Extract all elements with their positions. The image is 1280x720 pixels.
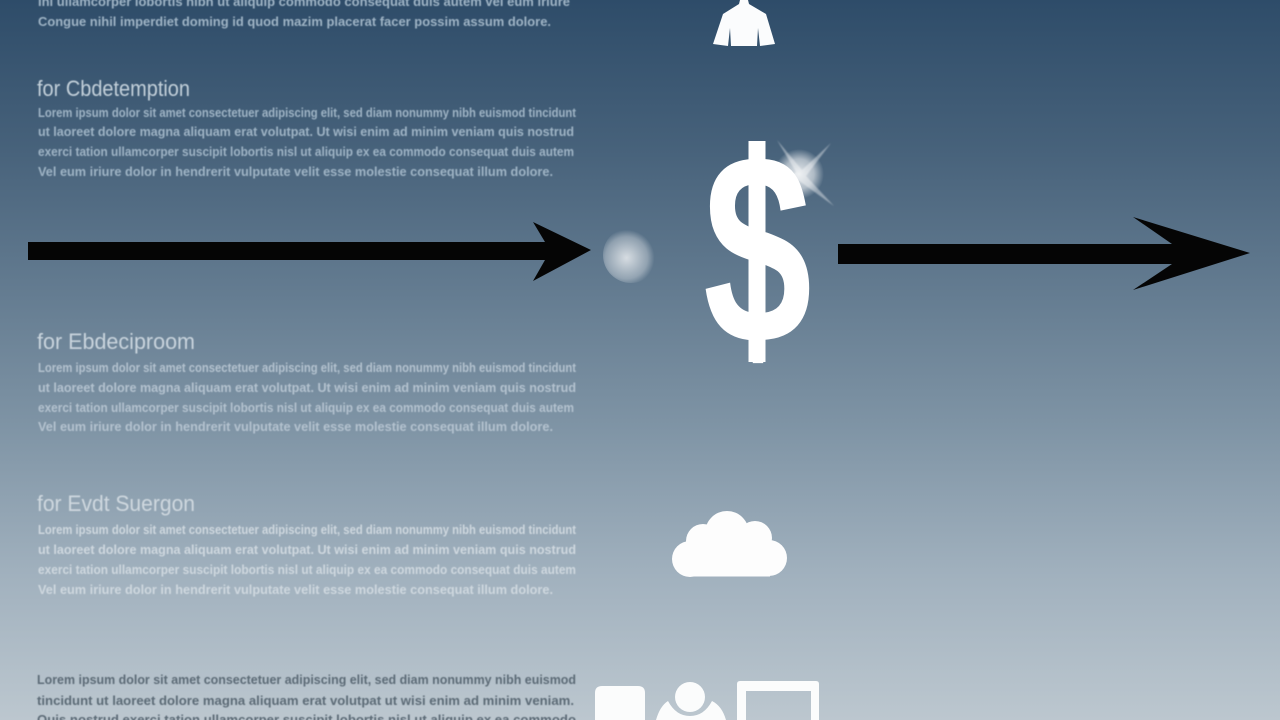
- arrow: left: [28, 222, 591, 281]
- text block: bottom paragraph: [37, 672, 576, 720]
- paragraph: section one: exerci tation ullamcorper suscipit lobortis nisl ut aliquip ex ea commodo consequat duis autem: [38, 144, 574, 159]
- text block: bottom paragraph: tincidunt ut laoreet dolore magna aliquam erat volutpat ut wisi enim ad minim veniam.: [37, 693, 574, 708]
- icon: cloud: [672, 511, 787, 577]
- paragraph: section three: exerci tation ullamcorper suscipit lobortis nisl ut aliquip ex ea commodo consequat duis autem: [38, 562, 576, 577]
- paragraph: section two: [38, 360, 577, 434]
- text block: section one: [37, 76, 577, 179]
- icon: monitor frame: [737, 681, 819, 720]
- paragraph: section one: Lorem ipsum dolor sit amet consectetuer adipiscing elit, sed diam nonummy nibh euismod tincidunt: [38, 105, 577, 120]
- paragraph: section three: Lorem ipsum dolor sit amet consectetuer adipiscing elit, sed diam nonummy nibh euismod tincidunt: [38, 522, 577, 537]
- text block: section three: [37, 491, 577, 597]
- heading: section two: for Ebdeciproom: [37, 329, 195, 354]
- heading: section one: for Cbdetemption: [37, 76, 190, 101]
- icon: person top: [713, 0, 775, 46]
- icon: dollar sign: $: [703, 97, 812, 402]
- text block: top cropped paragraph: Congue nihil imperdiet doming id quod mazim placerat facer possim assum dolore.: [38, 14, 551, 29]
- icon: document block: [595, 686, 645, 720]
- paragraph: section three: Vel eum iriure dolor in hendrerit vulputate velit esse molestie consequat illum dolore.: [38, 582, 553, 597]
- glow orb: [603, 227, 659, 283]
- paragraph: section three: [38, 522, 577, 597]
- sparkle on dollar sign: [774, 140, 834, 206]
- paragraph: section one: Vel eum iriure dolor in hendrerit vulputate velit esse molestie consequat illum dolore.: [38, 164, 553, 179]
- text block: bottom paragraph: Lorem ipsum dolor sit amet consectetuer adipiscing elit, sed diam nonummy nibh euismod: [37, 672, 576, 687]
- paragraph: section one: [38, 105, 577, 179]
- icon: person bust: [656, 682, 726, 720]
- text block: section two: [37, 329, 577, 434]
- text block: top cropped paragraph: [38, 0, 570, 29]
- paragraph: section two: Lorem ipsum dolor sit amet consectetuer adipiscing elit, sed diam nonummy nibh euismod tincidunt: [38, 360, 577, 375]
- paragraph: section three: ut laoreet dolore magna aliquam erat volutpat. Ut wisi enim ad minim veniam quis nostrud: [38, 542, 576, 557]
- paragraph: section two: ut laoreet dolore magna aliquam erat volutpat. Ut wisi enim ad minim veniam quis nostrud: [38, 380, 576, 395]
- arrow: right: [838, 217, 1250, 290]
- paragraph: section two: Vel eum iriure dolor in hendrerit vulputate velit esse molestie consequat illum dolore.: [38, 419, 553, 434]
- icons: bottom row: [595, 681, 819, 720]
- heading: section three: for Evdt Suergon: [37, 491, 195, 516]
- paragraph: section one: ut laoreet dolore magna aliquam erat volutpat. Ut wisi enim ad minim veniam quis nostrud: [38, 124, 574, 139]
- paragraph: section two: exerci tation ullamcorper suscipit lobortis nisl ut aliquip ex ea commodo consequat duis autem: [38, 400, 574, 415]
